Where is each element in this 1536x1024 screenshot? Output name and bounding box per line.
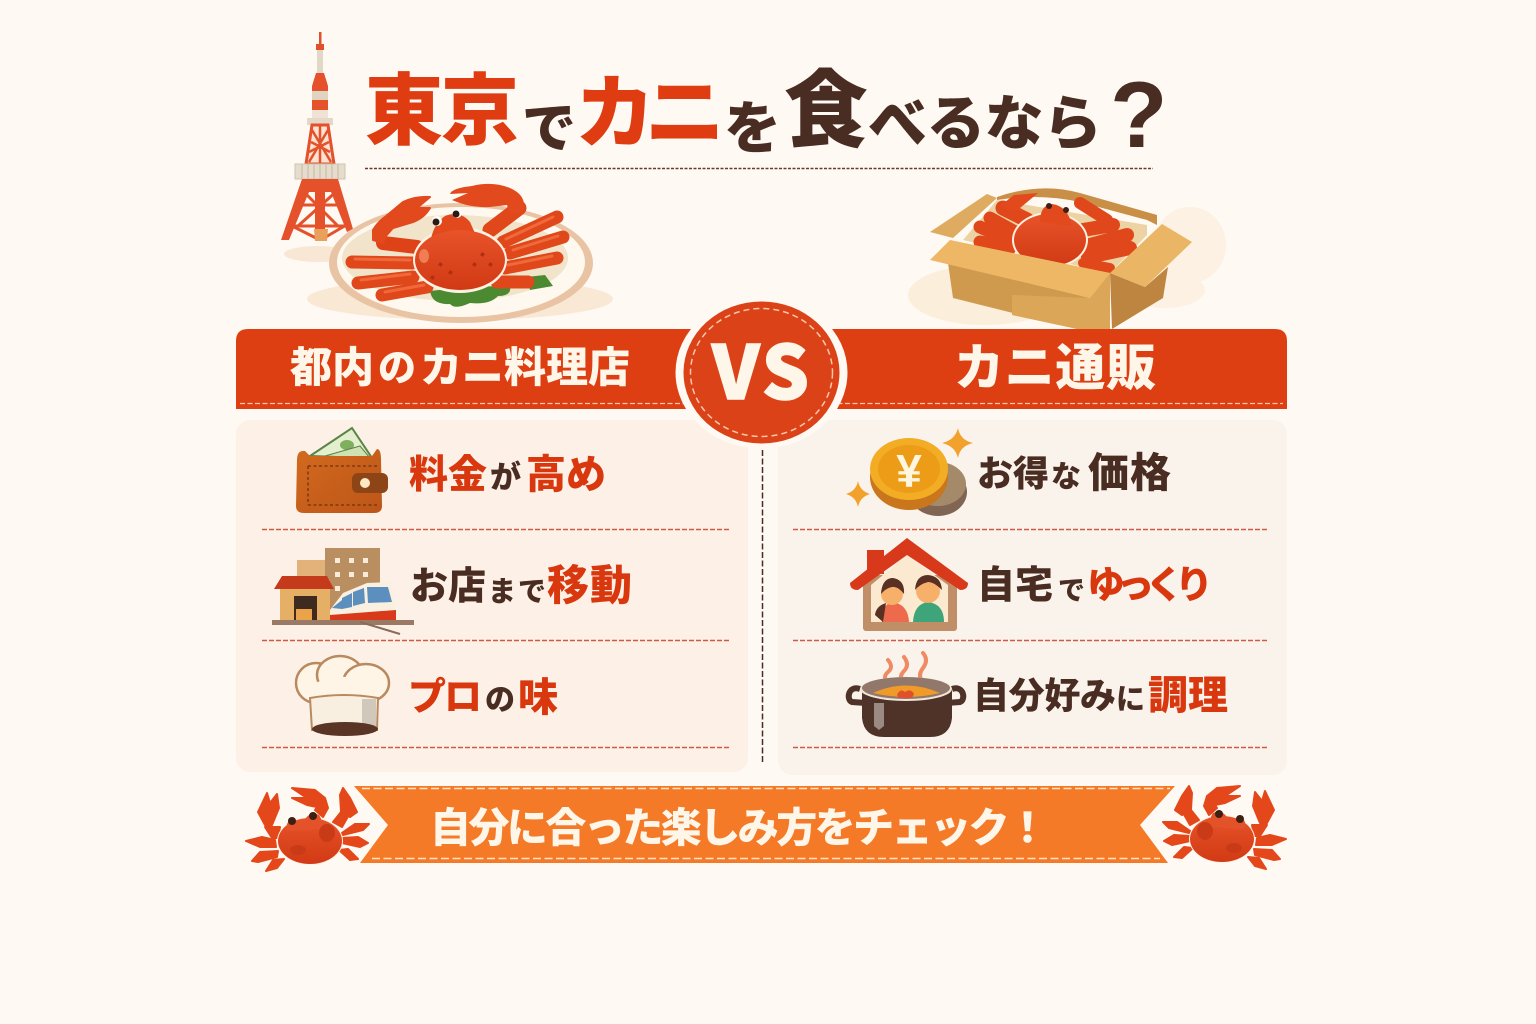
header bar: right — [820, 329, 1287, 409]
row dividers — [262, 530, 1267, 748]
title: を — [724, 97, 781, 161]
header bar: left: カニ料理店 — [420, 344, 630, 391]
text: 自分好みに調理: に — [1116, 684, 1145, 716]
text: 自宅でゆっくり: 自宅 — [977, 565, 1053, 607]
title: 東京 — [365, 67, 519, 155]
text: お得な価格: お得 — [977, 453, 1049, 494]
text: お得な価格: な — [1051, 461, 1081, 494]
row 3: cooking — [849, 653, 1228, 737]
text: 自分好みに調理 — [973, 674, 1228, 718]
row 2: travel — [272, 548, 632, 634]
text: 自宅でゆっくり: ゆっくり — [1087, 565, 1213, 607]
text: プロの味: の — [485, 684, 515, 717]
text: 自宅でゆっくり — [977, 565, 1213, 607]
icon: chef hat — [296, 656, 389, 736]
title: で — [522, 99, 576, 159]
text: 自宅でゆっくり: で — [1058, 576, 1085, 606]
text: 料金が高め: 高め — [526, 453, 606, 497]
text: お店まで移動: お店 — [410, 566, 486, 608]
illustration: crab in cardboard box — [908, 188, 1226, 329]
text: お得な価格: 価格 — [1088, 450, 1171, 496]
title: カニ — [575, 69, 725, 158]
bottom banner: 自分に合った楽しみ方をチェック！ — [430, 805, 1048, 851]
VS badge — [676, 296, 848, 448]
row 1: value — [846, 428, 1171, 516]
icon: small crab right — [1163, 786, 1286, 869]
title: ? — [1110, 62, 1167, 167]
text: 自分好みに調理: 自分好み — [973, 675, 1116, 716]
text: プロの味 — [408, 676, 558, 720]
icon: house with family — [850, 538, 968, 631]
text: 料金が高め — [409, 453, 606, 497]
text: 料金が高め: 料金 — [409, 454, 487, 497]
text: 自分好みに調理: 調理 — [1148, 674, 1228, 718]
header bar: left: 都内 — [290, 344, 374, 391]
panel: left options — [236, 420, 748, 772]
text: プロの味: 味 — [518, 676, 558, 720]
header bar: left — [236, 329, 700, 409]
text: 料金が高め: が — [490, 460, 521, 495]
title: べるなら — [868, 91, 1102, 157]
title underline — [365, 168, 1153, 170]
panel: right options — [778, 420, 1287, 775]
icon: yen coins — [846, 428, 973, 516]
icon: small crab left — [246, 788, 369, 871]
row 2: home — [850, 538, 1213, 631]
icon: yen coins: ¥ — [896, 445, 922, 497]
row 1: price — [296, 428, 606, 513]
icon: wallet — [296, 428, 388, 513]
header bar: left: の — [378, 348, 416, 390]
text: お得な価格 — [977, 450, 1171, 496]
text: プロの味: プロ — [408, 677, 482, 719]
illustration: crab on plate — [307, 184, 613, 323]
VS badge: VS — [711, 314, 809, 421]
text: お店まで移動 — [410, 562, 632, 609]
icon: steaming pot — [849, 653, 963, 737]
icon: Tokyo Tower — [281, 32, 353, 262]
row 3: chef — [296, 656, 558, 736]
title: 食 — [784, 64, 868, 158]
title — [365, 62, 1167, 167]
text: お店まで移動: まで — [488, 576, 546, 607]
icon: town and train — [272, 548, 414, 634]
header bar: right: カニ通販 — [954, 340, 1156, 396]
bottom banner — [354, 786, 1175, 863]
centre divider — [762, 450, 764, 762]
text: お店まで移動: 移動 — [547, 562, 632, 609]
